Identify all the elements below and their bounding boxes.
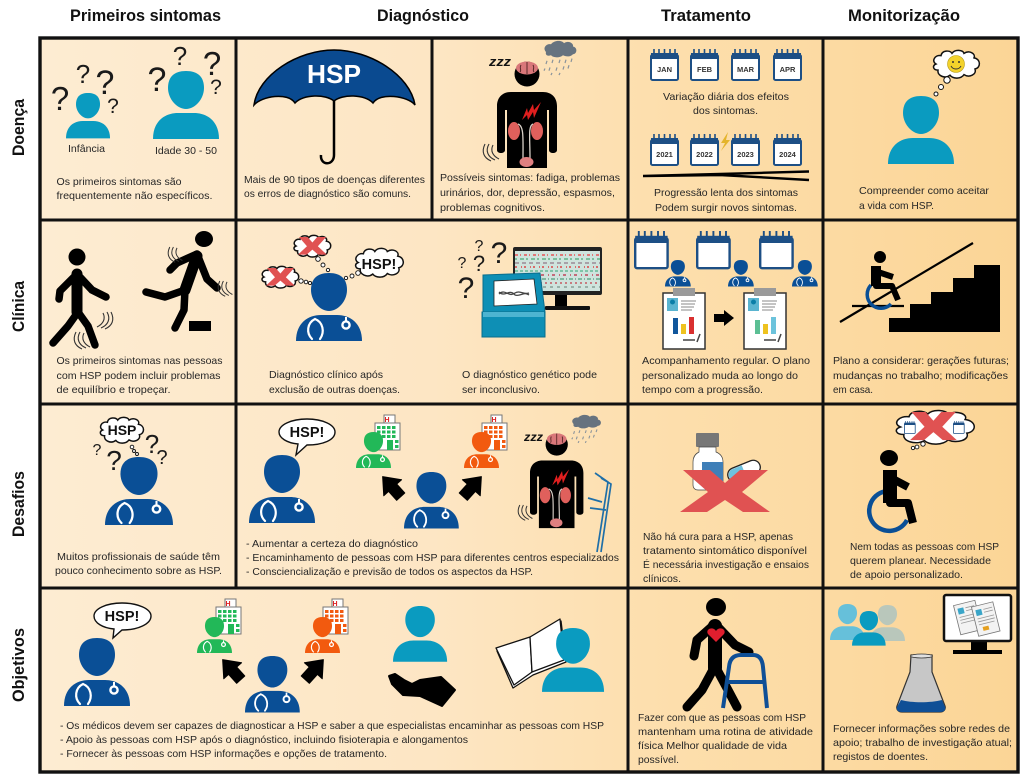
icon: month calendars (651, 49, 801, 80)
column headings: Primeiros sintomas (70, 6, 221, 25)
panel: clínica / monitorização: mudanças no trabalho; modificações (833, 370, 1008, 382)
panel: doença / primeiros sintomas: Idade 30 - 50 (155, 145, 217, 157)
column headings: Tratamento (661, 6, 751, 25)
panel: doença / primeiros sintomas: Os primeiros sintomas são (56, 176, 182, 188)
icon: happy thought person (888, 50, 979, 164)
panel: objetivos / diagnóstico: - Os médicos devem ser capazes de diagnosticar a HSP e saber a que especialistas encaminhar as pessoas com HSP (60, 720, 604, 732)
icon: doctor with doubts: ? (145, 429, 159, 459)
icon: child with question marks: ? (76, 59, 90, 89)
column headings: Diagnóstico (377, 6, 469, 25)
panel: objetivos / diagnóstico: - Apoio às pessoas com HSP após o diagnóstico, incluindo fisioterapia e alongamentos (60, 734, 468, 746)
icon: body with crutches: zzz (523, 430, 543, 444)
panel: doença / tratamento: Podem surgir novos sintomas. (655, 202, 797, 214)
panel: objetivos / tratamento: Fazer com que as pessoas com HSP (638, 712, 806, 724)
icon: gene sequencer and monitor (458, 237, 602, 337)
panel: doença / possíveis sintomas (440, 41, 620, 214)
icon: HSP umbrella: HSP (307, 59, 361, 89)
panel: doença / tratamento: dos sintomas. (693, 105, 758, 117)
icon: gene sequencer and monitor: ? (475, 238, 484, 255)
panel: desafios / diagnóstico: - Encaminhamento de pessoas com HSP para diferentes centros especializados (246, 552, 619, 564)
icon: month calendars: JAN (657, 65, 672, 74)
panel: doença / primeiros sintomas: Infância (68, 143, 105, 155)
panel: desafios / tratamento: É necessária investigação e ensaios (643, 558, 809, 571)
icon: doctor thinking (262, 235, 403, 341)
icon: person walking with tremor (53, 248, 113, 349)
icon: orange specialist (464, 415, 507, 468)
panel: objetivos / monitorização: Fornecer informações sobre redes de (833, 723, 1010, 735)
icon: month calendars: FEB (697, 65, 713, 74)
panel: clínica / primeiros sintomas: de equilíbrio e tropeçar. (56, 384, 170, 396)
panel: doença / monitorização: Compreender como aceitar (859, 185, 990, 197)
icon: person tripping on block (146, 231, 232, 331)
panel: desafios / monitorização: Nem todas as pessoas com HSP (850, 541, 999, 553)
panel: objetivos / diagnóstico: - Fornecer às pessoas com HSP informações e opções de tratamento. (60, 748, 387, 760)
icon: clipboards with changing plan (663, 288, 786, 349)
progression lines (643, 172, 809, 180)
icon: gene sequencer and monitor: ? (473, 251, 485, 276)
icon: laboratory flask (897, 654, 945, 712)
panel: clínica / diagnóstico: ser inconclusivo. (462, 384, 540, 396)
panel: desafios / monitorização (850, 410, 999, 581)
panel: clínica / diagnóstico: O diagnóstico genético pode (462, 369, 597, 381)
icon: doctor saying HSP (249, 419, 335, 523)
icon: gene sequencer and monitor: ? (491, 237, 507, 270)
panel: doença / primeiros sintomas: frequentemente não específicos. (56, 190, 212, 202)
icon: doctor with doubts: ? (106, 445, 122, 476)
panel: desafios / tratamento: tratamento sintomático disponível (643, 545, 807, 557)
panel: desafios / diagnóstico: - Aumentar a certeza do diagnóstico (246, 538, 418, 550)
row labels: Clínica (9, 281, 28, 332)
panel: doença / diagnóstico umbrella: Mais de 90 tipos de doenças diferentes (244, 174, 425, 186)
icon: regular appointments (635, 231, 818, 287)
row labels (9, 99, 28, 702)
icon: body with symptoms: zzz (488, 54, 512, 69)
panel: desafios / diagnóstico: - Consciencialização e previsão de todos os aspectos da HSP. (246, 566, 533, 578)
icon: child with question marks: ? (96, 64, 114, 102)
panel: objetivos / tratamento: física Melhor qualidade de vida (638, 740, 787, 752)
icon: referring doctor with arrows (214, 652, 332, 712)
column headings (70, 6, 960, 25)
icon: doctor with doubts: HSP (108, 422, 136, 438)
icon: year calendars with bolt: 2021 (656, 150, 673, 159)
panel: objetivos / tratamento: possível. (638, 754, 679, 766)
icon: green specialist: H (225, 601, 231, 608)
icon: doctor saying HSP (64, 603, 151, 706)
icon: body with crutches (518, 415, 611, 552)
icon: year calendars with bolt (651, 132, 801, 165)
panel: clínica / diagnóstico (262, 235, 602, 396)
icon: green specialist (356, 415, 400, 468)
column headings: Monitorização (848, 6, 960, 25)
panel: doença / tratamento (643, 49, 809, 214)
panel: doença / diagnóstico umbrella: os erros de diagnóstico são comuns. (244, 188, 411, 200)
icon: body with symptoms (483, 41, 576, 168)
panel: desafios / tratamento: clínicos. (643, 573, 681, 585)
panel: objetivos / monitorização: apoio; trabalho de investigação atual; (833, 737, 1012, 749)
icon: adult with question marks: ? (173, 41, 187, 71)
icon: child with question marks (51, 59, 119, 138)
icon: adult with question marks: ? (148, 61, 166, 99)
icon: orange specialist: H (491, 417, 497, 424)
panel: desafios / diagnóstico (246, 415, 619, 578)
icon: child with question marks: ? (107, 95, 119, 118)
panel: doença / monitorização: a vida com HSP. (859, 200, 934, 212)
panel: doença / possíveis sintomas: Possíveis sintomas: fadiga, problemas (440, 172, 620, 184)
panel: clínica / tratamento (635, 231, 818, 396)
panel: objetivos / tratamento (638, 598, 813, 766)
icon: wheelchair user with crossed-out plans (869, 410, 974, 531)
icon: person with open book (496, 619, 604, 692)
icon: orange specialist: H (332, 601, 338, 608)
panel: desafios / primeiros sintomas (55, 417, 222, 577)
panel: clínica / primeiros sintomas: com HSP podem incluir problemas (56, 370, 220, 382)
panel: doença / monitorização (859, 50, 990, 212)
panel: desafios / primeiros sintomas: pouco conhecimento sobre as HSP. (55, 565, 222, 577)
icon: green specialist: H (384, 417, 390, 424)
panel: clínica / monitorização (833, 243, 1009, 396)
icon: month calendars: APR (780, 65, 796, 74)
panel: desafios / primeiros sintomas: Muitos profissionais de saúde têm (57, 551, 220, 563)
icon: person exercising with walker (687, 598, 767, 708)
icon: medicine crossed out (680, 433, 770, 512)
icon: year calendars with bolt: 2023 (737, 150, 754, 159)
panel: clínica / monitorização: Plano a considerar: gerações futuras; (833, 355, 1009, 367)
icon: month calendars: MAR (737, 65, 755, 74)
panel: objetivos / monitorização: registos de doentes. (833, 751, 928, 763)
icon: adult with question marks: ? (210, 76, 222, 99)
panel: desafios / tratamento (643, 433, 809, 585)
icon: HSP umbrella (254, 50, 415, 163)
panel: clínica / diagnóstico: exclusão de outras doenças. (269, 384, 400, 396)
panel: doença / tratamento: Progressão lenta dos sintomas (654, 187, 798, 199)
row labels: Objetivos (9, 628, 28, 702)
icon: doctor thinking: HSP! (362, 257, 396, 273)
panel: clínica / tratamento: Acompanhamento regular. O plano (642, 355, 810, 367)
panel: clínica / primeiros sintomas (53, 231, 232, 396)
icon: child with question marks: ? (51, 80, 69, 117)
icon: year calendars with bolt: 2022 (696, 150, 713, 159)
panel: objetivos / tratamento: mantenham uma rotina de atividade (638, 726, 813, 738)
panel: objetivos / diagnóstico (60, 599, 604, 760)
icon: gene sequencer and monitor: ? (458, 272, 474, 305)
panel: desafios / monitorização: querem planear. Necessidade (850, 555, 991, 567)
panel: doença / possíveis sintomas: urinários, dor, depressão, espasmos, (440, 187, 615, 199)
panel: objetivos / monitorização (830, 595, 1012, 763)
icon: doctor saying HSP: HSP! (105, 609, 139, 625)
icon: referring doctor with arrows (374, 469, 490, 528)
panel: doença / primeiros sintomas (51, 41, 222, 202)
row labels: Doença (9, 99, 28, 156)
panel: clínica / monitorização: em casa. (833, 384, 873, 396)
panel: doença / diagnóstico umbrella (244, 50, 425, 200)
icon: support group (830, 604, 905, 646)
panel: clínica / tratamento: personalizado muda ao longo do (642, 370, 798, 382)
panel: doença / tratamento: Variação diária dos efeitos (663, 91, 789, 103)
icon: doctor saying HSP: HSP! (290, 425, 324, 441)
icon: year calendars with bolt: 2024 (779, 150, 797, 159)
icon: orange specialist (305, 599, 348, 653)
icon: person supported by hand (389, 606, 455, 706)
icon: doctor with doubts: ? (156, 447, 168, 469)
panel: clínica / diagnóstico: Diagnóstico clínico após (269, 369, 383, 381)
icon: doctor with doubts: ? (93, 442, 102, 459)
panel: clínica / primeiros sintomas: Os primeiros sintomas nas pessoas (56, 355, 222, 367)
icon: adult with question marks (148, 41, 222, 139)
panel: desafios / monitorização: de apoio personalizado. (850, 569, 963, 581)
icon: stair lift (840, 243, 1000, 332)
icon: gene sequencer and monitor: ? (458, 255, 467, 272)
icon: computer with records (944, 595, 1011, 654)
row labels: Desafios (9, 471, 28, 537)
icon: green specialist (197, 599, 241, 653)
panel: clínica / tratamento: tempo com a progressão. (642, 384, 763, 396)
panel: doença / possíveis sintomas: problemas cognitivos. (440, 202, 545, 214)
icon: doctor with doubts (93, 417, 173, 525)
icon: adult with question marks: ? (203, 45, 221, 82)
panel: desafios / tratamento: Não há cura para a HSP, apenas (643, 531, 793, 543)
